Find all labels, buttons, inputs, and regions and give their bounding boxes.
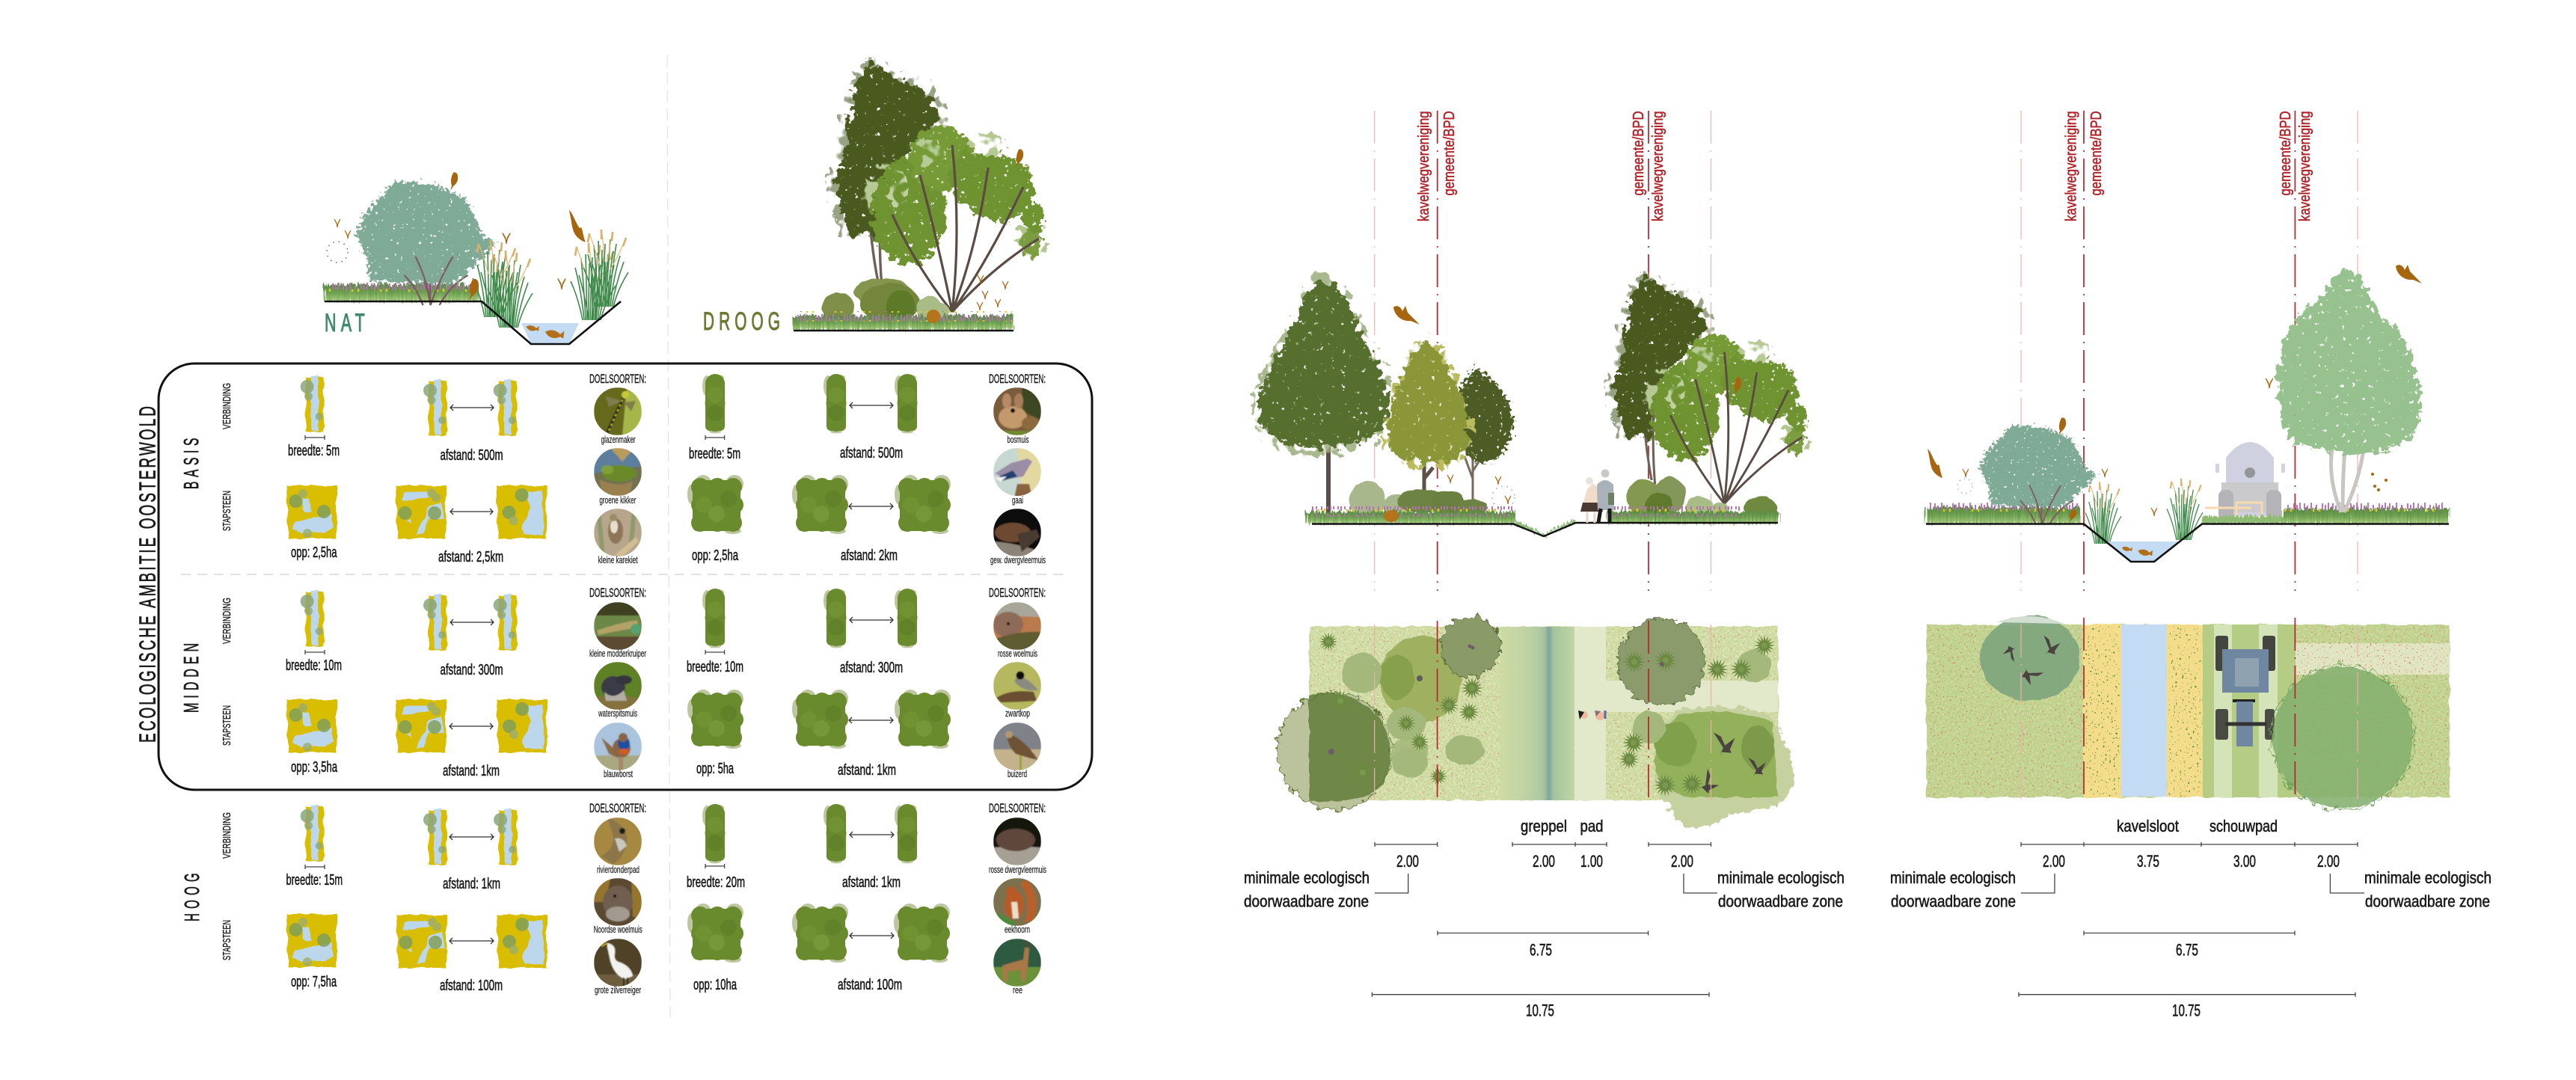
icon: swale grass — [1513, 519, 1575, 536]
icon: dry connection pair — [824, 374, 917, 434]
icon: dark tree right — [1603, 270, 1717, 485]
icon: tractor rear view — [2205, 442, 2285, 523]
arrow — [849, 717, 893, 723]
icon: shrubs left — [1349, 481, 1487, 520]
label: afstand: afstand: 2,5km — [438, 549, 503, 565]
arrow — [849, 503, 893, 509]
icon: meadow left — [1307, 506, 1515, 524]
boundary: pale limits — [1375, 111, 1711, 591]
icon: shrubs — [821, 278, 950, 323]
panel: hoog dry — [687, 801, 1046, 995]
photo: rosse dwergvleermuis — [993, 817, 1041, 865]
note left — [1890, 868, 2016, 911]
arrow — [850, 933, 894, 939]
label: buizerd: buizerd — [1008, 768, 1027, 779]
value: 2.00: 2.00 — [1533, 852, 1555, 871]
icon: dry stepping stone — [687, 903, 743, 963]
label: kavelwegvereniging: kavelwegvereniging — [1650, 111, 1666, 221]
photo: glazenmaker — [594, 387, 642, 435]
note left — [1244, 868, 1370, 911]
arrow — [450, 723, 493, 729]
label: waterspitsmuis: waterspitsmuis — [598, 708, 637, 719]
plan: tree canopy olive — [1379, 636, 1462, 722]
label: breedte: breedte: 20m — [687, 874, 745, 891]
label: kleine karekiet: kleine karekiet — [598, 554, 638, 565]
label: kleine modderkruiper: kleine modderkruiper — [589, 648, 646, 659]
value: 2.00: 2.00 — [1396, 852, 1419, 871]
icon: wet connection pair — [423, 379, 517, 435]
heading: DROOG: DROOG — [703, 307, 785, 336]
value: 3.00: 3.00 — [2233, 852, 2256, 871]
boundary: ownership lines plan — [2084, 618, 2295, 798]
photo: rosse woelmuis — [993, 602, 1041, 650]
value: 6.75: 6.75 — [2176, 941, 2198, 959]
label: afstand: afstand: 100m — [838, 977, 902, 993]
icon: light tree right — [1644, 334, 1809, 504]
label: stapsteen hoog: STAPSTEEN — [221, 920, 233, 960]
heading: HOOG: HOOG — [180, 868, 203, 921]
arrow — [450, 619, 494, 625]
dimension 6.75 — [2084, 930, 2295, 935]
label: afstand: afstand: 500m — [840, 445, 903, 461]
boundary: ownership lines — [1438, 111, 1649, 591]
leader left — [1375, 874, 1408, 893]
note right — [2364, 868, 2491, 911]
icon: wet connection pair — [423, 594, 517, 650]
label: kavelwegvereniging: kavelwegvereniging — [2297, 111, 2313, 221]
label: kavelwegvereniging: kavelwegvereniging — [1416, 111, 1432, 221]
label: gemeente/BPD: gemeente/BPD — [2088, 111, 2105, 196]
label: kavelwegvereniging: kavelwegvereniging — [2063, 111, 2079, 221]
label: afstand: afstand: 500m — [440, 447, 503, 464]
icon: dry connection width — [702, 804, 726, 868]
icon: wet stepping stone — [286, 485, 337, 539]
panel: rounded frame basis and midden — [159, 363, 1092, 790]
icon: wet connection width — [301, 805, 325, 869]
icon: fauna — [1928, 265, 2422, 556]
icon: dry stepping stone — [687, 690, 743, 749]
icon: dry stepping stone — [687, 475, 743, 534]
panel: cross section kavelsloot en schouwpad — [1926, 111, 2449, 591]
label: gemeente/BPD: gemeente/BPD — [2278, 111, 2294, 196]
icon: meadow right — [2202, 503, 2449, 524]
label: greppel: greppel — [1521, 817, 1567, 835]
label: breedte: breedte: 5m — [689, 446, 740, 462]
value: 2.00: 2.00 — [2043, 852, 2065, 871]
leader right — [2330, 874, 2364, 893]
plan: yellow banks — [2083, 625, 2203, 797]
heading: BASIS: BASIS — [180, 434, 203, 489]
photo: buizerd — [993, 722, 1041, 770]
icon: walking couple — [1580, 470, 1614, 523]
icon: wet stepping stone pair — [396, 699, 547, 752]
icon: reeds left — [473, 240, 533, 328]
panel: cross section greppel en pad — [1252, 111, 1809, 591]
icon: dry stepping stone pair — [792, 690, 951, 749]
note left: minimale ecologisch — [1890, 868, 2016, 887]
leader left — [2021, 874, 2055, 893]
label: gemeente/BPD: gemeente/BPD — [1631, 111, 1647, 196]
plan: path — [1574, 627, 1778, 800]
icon: ground line — [794, 330, 1013, 331]
label: gaai: gaai — [1012, 494, 1023, 506]
label: verbinding hoog: VERBINDING — [221, 812, 233, 859]
boundary: pale limits plan — [1375, 625, 1711, 800]
label: verbinding basis: VERBINDING — [221, 383, 233, 429]
plan: bank dots — [2085, 626, 2201, 797]
label: groene kikker: groene kikker — [599, 494, 637, 506]
arrow — [450, 834, 494, 840]
icon: ditch water — [521, 323, 579, 344]
label: opp: opp: 3,5ha — [291, 759, 338, 776]
label: breedte: breedte: 10m — [687, 659, 743, 675]
plan: couple top view — [1578, 711, 1605, 720]
photo: waterspitsmuis — [594, 662, 642, 710]
heading: NAT: NAT — [325, 309, 369, 337]
photo: grote zilverreiger — [594, 939, 642, 987]
icon: light tree — [863, 126, 1046, 312]
label: ree: ree — [1013, 984, 1022, 995]
panel: basis wet — [286, 372, 646, 565]
label: rosse dwergvleermuis: rosse dwergvleermuis — [989, 864, 1046, 875]
label: grote zilverreiger: grote zilverreiger — [595, 984, 641, 995]
panel: plan kavelsloot en schouwpad — [1890, 616, 2491, 1020]
heading: doelsoorten: DOELSOORTEN: — [989, 586, 1046, 600]
icon: olive tree — [1383, 335, 1473, 497]
title: ecologische ambitie: ECOLOGISCHE AMBITIE OOSTERWOLD — [135, 404, 160, 743]
plan: tractor top view — [2215, 636, 2275, 746]
label: afstand: afstand: 2km — [841, 547, 898, 564]
label: breedte: breedte: 15m — [286, 872, 343, 889]
value: 2.00: 2.00 — [2317, 852, 2340, 871]
dimension 6.75 — [1438, 930, 1649, 935]
note left: doorwaadbare zone — [1244, 892, 1369, 911]
label: afstand: afstand: 1km — [443, 763, 500, 779]
arrow — [850, 617, 893, 623]
photo: noordse woelmuis — [594, 878, 642, 926]
label: afstand: afstand: 100m — [440, 978, 503, 994]
plan: ditch gradient — [1500, 627, 1574, 800]
heading: doelsoorten: DOELSOORTEN: — [589, 586, 646, 600]
dimension chain top — [2021, 842, 2358, 847]
icon: reeds left — [2085, 482, 2121, 544]
label: gemeente/BPD: gemeente/BPD — [1441, 111, 1458, 196]
icon: dry meadow — [794, 311, 1013, 330]
plan: schouwpad — [2203, 625, 2296, 797]
photo: gaai — [993, 448, 1041, 497]
heading: doelsoorten: DOELSOORTEN: — [589, 372, 646, 386]
label: opp: opp: 5ha — [696, 761, 735, 777]
heading: MIDDEN: MIDDEN — [180, 639, 203, 713]
label: schouwpad: schouwpad — [2209, 817, 2278, 835]
icon: wet connection pair — [423, 809, 517, 865]
panel: basis dry — [687, 372, 1046, 565]
label: rivierdonderpad: rivierdonderpad — [597, 864, 640, 875]
icon: wet shrub — [1979, 426, 2097, 524]
label: breedte: breedte: 5m — [288, 443, 340, 459]
plan: tree canopy right — [2271, 665, 2414, 810]
value: 1.00: 1.00 — [1580, 852, 1603, 871]
icon: dark tree left — [1458, 368, 1513, 500]
icon: wet stepping stone — [286, 914, 337, 967]
label: bosmuis: bosmuis — [1007, 434, 1029, 445]
dimension chain top — [1375, 842, 1711, 847]
plan: field base — [1927, 625, 2450, 797]
icon: wet connection width — [301, 590, 325, 654]
icon: dry connection width — [702, 374, 726, 440]
boundary: ownership lines — [2084, 111, 2295, 591]
label: opp: opp: 10ha — [693, 977, 737, 993]
plan: field strip — [2296, 643, 2450, 675]
heading: doelsoorten: DOELSOORTEN: — [589, 801, 646, 815]
plan: field speckle — [1310, 628, 1777, 800]
label: rosse woelmuis: rosse woelmuis — [998, 648, 1037, 659]
label: opp: opp: 2,5ha — [692, 547, 739, 564]
plan: tree canopy left — [1980, 616, 2080, 701]
plan: tree canopy large right — [1654, 706, 1794, 827]
arrow — [850, 402, 893, 408]
panel: midden dry — [687, 586, 1046, 779]
value: 10.75: 10.75 — [2172, 1001, 2201, 1020]
boundary: pale limits — [2021, 111, 2358, 591]
plan: field speckle — [1928, 626, 2448, 797]
icon: dry stepping stone pair — [792, 475, 951, 534]
boundary: ownership lines plan — [1438, 621, 1649, 800]
label: blauwborst: blauwborst — [604, 768, 633, 779]
icon: reeds right — [571, 230, 628, 320]
icon: reeds right — [2167, 479, 2203, 540]
icon: meadow left — [1926, 501, 2079, 524]
icon: wet connection width — [301, 375, 325, 440]
divider: vertical wet dry axis — [667, 55, 670, 1018]
icon: wet stepping stone pair — [396, 915, 547, 968]
value: 6.75: 6.75 — [1530, 941, 1552, 959]
icon: wet stepping stone — [286, 699, 337, 752]
icon: shrub willow — [356, 182, 497, 305]
icon: ground profile — [1312, 523, 1778, 536]
arrow — [450, 405, 494, 411]
icon: ground profile — [325, 301, 621, 344]
panel: plan greppel en pad — [1244, 616, 1844, 1020]
label: opp: opp: 7,5ha — [291, 974, 337, 990]
heading: doelsoorten: DOELSOORTEN: — [989, 801, 1046, 815]
icon: dark tree — [824, 56, 951, 286]
plan: shrubs — [1319, 632, 1775, 785]
divider — [181, 574, 1064, 575]
plan: tree canopy right — [1618, 619, 1705, 705]
label: afstand: afstand: 1km — [443, 876, 500, 892]
icon: fauna — [1384, 306, 1741, 522]
arrow — [450, 509, 493, 515]
value: 3.75: 3.75 — [2137, 852, 2159, 871]
label: verbinding midden: VERBINDING — [221, 598, 233, 644]
icon: ground profile — [1926, 524, 2449, 562]
icon: pale tree — [2278, 270, 2420, 512]
heading: doelsoorten: DOELSOORTEN: — [989, 372, 1046, 386]
label: glazenmaker: glazenmaker — [601, 434, 636, 445]
illustration: DROOG dry profile — [703, 56, 1046, 336]
arrow — [850, 832, 894, 838]
photo: bosmuis — [993, 387, 1041, 435]
photo: zwartkop — [993, 662, 1041, 710]
note right: doorwaadbare zone — [1718, 892, 1843, 911]
label: afstand: afstand: 1km — [838, 762, 896, 779]
value: 2.00: 2.00 — [1671, 852, 1693, 871]
value: 10.75: 10.75 — [1526, 1001, 1554, 1020]
icon: dry stepping stone pair — [792, 903, 950, 963]
icon: fauna — [927, 149, 1023, 323]
leader right — [1684, 874, 1717, 893]
label: afstand: afstand: 300m — [440, 662, 503, 678]
plan: tree canopy top — [1441, 616, 1500, 677]
photo: kleine modderkruiper — [594, 602, 642, 650]
note right — [1717, 868, 1844, 911]
label: noordse woelmuis: Noordse woelmuis — [594, 924, 643, 935]
note left: minimale ecologisch — [1244, 868, 1370, 887]
label: zwartkop: zwartkop — [1005, 708, 1030, 719]
panel: midden wet — [286, 586, 646, 779]
label: pad: pad — [1580, 817, 1604, 835]
label: afstand: afstand: 1km — [842, 874, 901, 891]
dimension 10.75 — [1372, 992, 1709, 997]
note right: minimale ecologisch — [2364, 868, 2491, 887]
icon: meadow right — [1608, 506, 1778, 524]
label: kavelsloot: kavelsloot — [2117, 817, 2179, 835]
icon: wet stepping stone pair — [396, 485, 546, 539]
photo: rivierdonderpad — [594, 817, 642, 865]
photo: dwergvleermuis — [993, 509, 1041, 556]
icon: dry connection pair — [824, 804, 917, 863]
label: stapsteen basis: STAPSTEEN — [221, 491, 233, 531]
boundary: pale limits plan — [2021, 625, 2358, 799]
icon: shrubs right — [1627, 477, 1777, 521]
photo: kleine karekiet — [594, 509, 642, 558]
icon: wet meadow — [325, 281, 479, 301]
label: afstand: afstand: 300m — [840, 660, 903, 676]
plan: tree canopy big left — [1277, 690, 1392, 809]
panel: hoog wet — [286, 801, 646, 995]
label: breedte: breedte: 10m — [286, 657, 342, 674]
label: stapsteen midden: STAPSTEEN — [221, 705, 233, 746]
icon: large tree — [1252, 273, 1394, 515]
note right: doorwaadbare zone — [2365, 892, 2490, 911]
icon: dry connection width — [702, 589, 726, 654]
arrow — [450, 938, 494, 944]
plan: water — [2121, 625, 2166, 797]
label: gew. dwergvleermuis: gew. dwergvleermuis — [990, 554, 1046, 565]
icon: ditch water — [2106, 541, 2180, 562]
note right: minimale ecologisch — [1717, 868, 1844, 887]
plan: field base — [1309, 627, 1779, 800]
icon: fauna — [327, 172, 586, 338]
photo: groene kikker — [594, 448, 642, 496]
dimension 10.75 — [2019, 992, 2355, 997]
note left: doorwaadbare zone — [1891, 892, 2016, 911]
label: eekhoorn: eekhoorn — [1005, 924, 1030, 935]
photo: ree — [993, 939, 1041, 987]
illustration: NAT wet profile — [325, 172, 628, 344]
photo: blauwborst — [594, 722, 642, 770]
photo: eekhoorn — [993, 878, 1041, 926]
icon: dry connection pair — [824, 589, 917, 648]
label: opp: opp: 2,5ha — [291, 544, 337, 561]
